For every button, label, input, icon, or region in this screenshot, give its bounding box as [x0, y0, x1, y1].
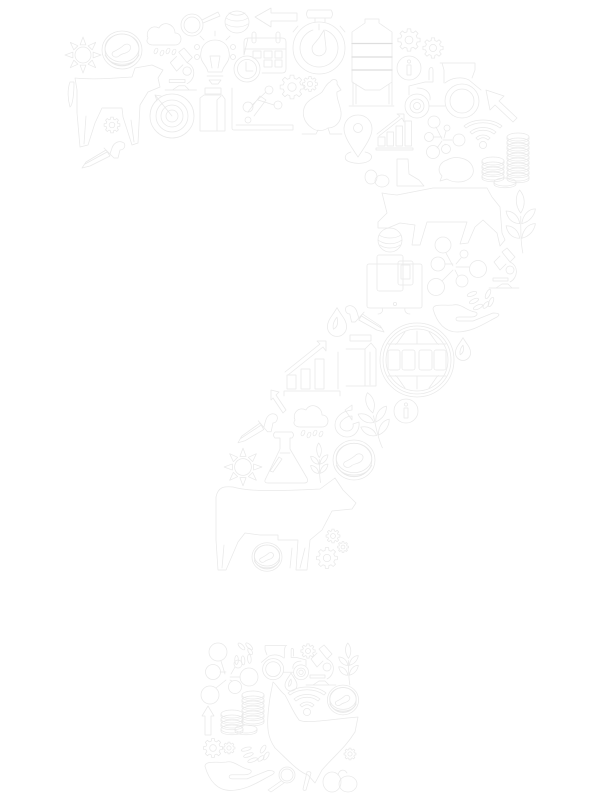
icon: microscope bottom [306, 645, 336, 685]
icon: bar chart middle [284, 341, 340, 396]
icon: petri dish middle [333, 440, 375, 480]
icon: gears top right [398, 29, 443, 58]
icon: flask [265, 432, 308, 483]
icon: refresh [335, 405, 359, 437]
icon: eggs top [365, 170, 389, 187]
icon: trend chart [232, 86, 293, 130]
icon: left arrow [255, 8, 297, 27]
icon: location pin [344, 115, 372, 163]
icon: gears lower [317, 529, 348, 568]
icon: bottle [200, 88, 225, 131]
icon: clock [234, 56, 260, 82]
icon: hand bottom [205, 762, 274, 790]
icon: microscope top [165, 48, 197, 90]
icon: globe [380, 323, 454, 397]
icon: wifi bottom [288, 687, 326, 716]
icon: capsule bottom [303, 772, 311, 790]
icon: petri dish top [102, 31, 142, 69]
icon: seeds bottom [230, 639, 258, 670]
icon: rain cloud top [147, 24, 181, 56]
icon: magnifier bottom [268, 767, 295, 792]
icon: dropper top [82, 142, 125, 168]
icon: info top [397, 56, 421, 80]
icon: lightbulb [194, 31, 236, 84]
icon: cow lower [216, 478, 356, 571]
icon: tractor [405, 63, 481, 118]
icon: cow top left [68, 65, 163, 147]
icon: gears middle [280, 75, 317, 99]
icon: network middle [428, 237, 486, 296]
icon: rain cloud middle [294, 406, 328, 438]
icon: magnifier [181, 12, 220, 36]
icon: calendar [244, 32, 286, 73]
icon: wheat right [506, 190, 535, 253]
icon: bar chart top [376, 114, 413, 150]
icon: arrow up small [271, 390, 286, 413]
icon: speech bubbles [439, 158, 473, 182]
icon: chicken [302, 80, 342, 134]
icon: coin stacks bottom [221, 691, 264, 735]
icon: sun top [65, 37, 101, 73]
icon: seeds bottom left [241, 745, 270, 763]
icon: small dish top [225, 11, 249, 33]
icon: sun lower [224, 448, 262, 486]
icon: petri dish bottom [327, 685, 359, 715]
icon: network bottom [201, 643, 258, 704]
icon: up arrow bottom [202, 706, 214, 735]
icon: network top [424, 116, 465, 158]
icon: gear bottom right [344, 748, 356, 760]
icon: eggs bottom [323, 770, 357, 792]
icon: devices [367, 255, 422, 314]
icon: silo [349, 19, 394, 106]
icon: target [150, 94, 194, 138]
icon: pig [378, 188, 505, 246]
icon: microscope middle [489, 248, 519, 288]
icon: wifi top [464, 120, 502, 149]
icon: arrow up left [486, 90, 517, 122]
icon: wheat small [311, 443, 328, 483]
icon: boot [397, 159, 424, 186]
icon: water drop right [455, 338, 471, 360]
icon: drop bottom [285, 673, 297, 691]
icon: gears bottom [204, 739, 235, 757]
icon: dropper lower [238, 414, 277, 443]
icon: wheat middle [354, 389, 395, 451]
icon: hand middle [433, 305, 499, 332]
icon: seeds middle [467, 289, 495, 311]
icon: wheat bottom [339, 643, 358, 685]
icon: carton middle [346, 335, 376, 386]
icon: chicken bottom [268, 682, 358, 783]
icon: dropper middle [345, 306, 384, 332]
icon: gear bottom top [301, 644, 315, 658]
icon: info middle [394, 399, 418, 423]
icon: stopwatch [293, 10, 345, 74]
icon: water drop left [327, 308, 347, 336]
icon: tractor bottom [261, 646, 308, 680]
icon: dish middle small [378, 228, 402, 252]
icon: coin stacks top [482, 133, 529, 188]
